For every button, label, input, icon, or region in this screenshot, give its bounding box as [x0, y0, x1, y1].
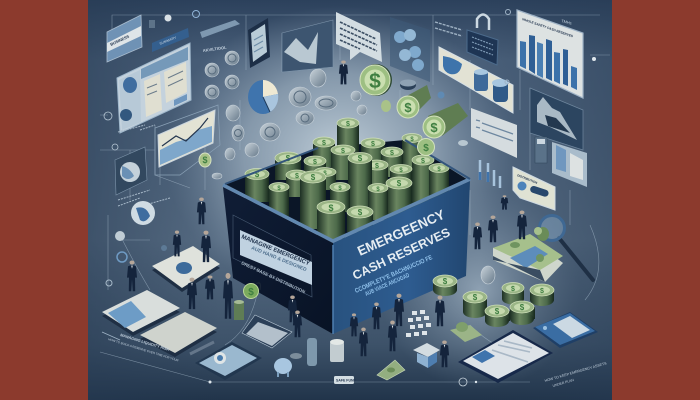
coin: small green left: [199, 153, 211, 167]
green coin stacks lower right: $: [443, 277, 448, 286]
coin roll: lower: [423, 103, 468, 138]
icon: green padlock tag: $: [248, 287, 254, 298]
scene: tablet: [195, 342, 262, 380]
coin stacks: $: [295, 173, 299, 180]
card: pill chart: [513, 167, 555, 210]
bin left label: MANAGINE EMERGENCY: [240, 234, 310, 267]
coin stacks: $: [277, 186, 281, 192]
connector lines: [100, 15, 610, 382]
green coin stacks lower right: $: [473, 293, 478, 302]
panel: honeycomb circles: [390, 17, 430, 82]
scene: glass box: [242, 315, 292, 348]
coin stacks: $: [322, 140, 326, 147]
coin: gray edge: [481, 266, 495, 284]
coin stacks: $: [421, 158, 425, 165]
bottom node: [208, 378, 477, 386]
button: blue bar: [152, 28, 189, 52]
bin left label: DRESY BASE BY DISTRIBUTION: [241, 260, 306, 294]
card: building chart: [552, 142, 587, 187]
small tag: bottom: [334, 376, 356, 384]
globe: [131, 201, 155, 225]
bin title: EMERGEENCY: [355, 207, 447, 259]
pie chart: [248, 80, 278, 114]
small gift box: [413, 343, 440, 368]
blue card: [533, 312, 598, 348]
coin stacks: $: [358, 208, 363, 217]
icons: top left: [104, 10, 200, 150]
business people: [127, 60, 527, 367]
cash bin: [223, 118, 470, 334]
coin stacks: $: [358, 154, 363, 163]
coin stacks: $: [375, 163, 379, 170]
coin: small green left: $: [202, 155, 208, 165]
caption: lower right: HOW TO KEEP EMERGENCY ASSETS: [544, 361, 608, 383]
coin stacks: $: [286, 154, 291, 163]
small label: top right: TMHs: [561, 18, 572, 26]
panel: dashboard window: [117, 43, 191, 133]
green coin stacks lower right: $: [540, 288, 544, 295]
caption: lower left: MANAGING LIQUIDITY RISK: [120, 333, 170, 352]
main panel: [88, 0, 612, 400]
small label: top right: [505, 10, 596, 84]
coin stacks: $: [311, 173, 316, 182]
white cubes: [406, 310, 431, 337]
green coin stacks lower right: $: [520, 303, 525, 312]
text lines: middle top: [435, 22, 462, 36]
scene: pen: [190, 342, 214, 354]
card: top left label: BUSINESS: [109, 34, 130, 47]
coin: big floating: $: [369, 70, 381, 93]
left data icons: [106, 231, 167, 286]
bin title: CASH RESERVES: [350, 225, 452, 283]
coin stacks: $: [338, 186, 342, 192]
scene: open book one: [102, 290, 180, 336]
icon: piggy bank: [274, 358, 292, 377]
panel: globe card: [115, 147, 147, 195]
panel: small mountain chart: [282, 20, 333, 72]
bin rim: [223, 179, 470, 241]
coin roll: upper: $: [404, 100, 412, 115]
coin stacks: $: [371, 141, 375, 148]
bin left label: [233, 215, 312, 297]
coin stacks: $: [376, 187, 380, 193]
panel: bar chart: WHOLE SAFETY CASH RESERVES: [522, 17, 573, 38]
panel: bar chart: [517, 10, 583, 98]
icon: padlock plate: [467, 14, 498, 65]
caption: lower left: HOW TO BUILD A RESERVE OVER TIME FOR YOUR: [108, 337, 180, 363]
card: pill chart: DISTRIBUTION: [517, 173, 538, 185]
coins: small floating green: [381, 80, 468, 156]
document tablet: [458, 330, 553, 383]
panel: line chart: [155, 105, 220, 175]
scene: open book two: [140, 312, 217, 357]
tablet device: [248, 18, 270, 68]
cash note bottom: [377, 360, 405, 380]
coin roll: lower: $: [430, 120, 438, 135]
coin stacks: $: [399, 168, 403, 174]
icon: calculator: [535, 137, 547, 163]
bin interior: [225, 140, 468, 240]
caption: lower right: UNDER PLAN: [552, 378, 575, 388]
small text: chart caption: AKVILTIOOL: [202, 45, 227, 53]
coin stacks: $: [328, 203, 334, 213]
scene: cylinders and jars: [234, 300, 344, 366]
coin stacks: $: [255, 170, 260, 179]
bin title: CCOMPLETY'E BACHNUCCIO FE: [354, 254, 434, 295]
coin roll: upper: [397, 85, 431, 118]
card: mid list: [471, 108, 517, 158]
bin title: [350, 207, 452, 298]
card: top left label: [107, 15, 142, 62]
coins: small floating green: $: [423, 143, 429, 154]
coin stacks: $: [313, 159, 317, 166]
speech bubble: [336, 12, 382, 62]
small text: left column: [118, 125, 170, 206]
coin stacks: $: [437, 167, 441, 173]
panel: mountain area chart: [530, 88, 583, 150]
icon: green padlock tag: [244, 283, 260, 298]
card: cylinders: [439, 47, 513, 113]
small note: green pile: [450, 322, 482, 342]
small roll by magnifier: [534, 227, 549, 241]
bin left face: [223, 187, 333, 334]
coin stacks: [245, 118, 449, 239]
button: blue bar: SUMMARY: [159, 35, 178, 46]
coin stacks: $: [323, 171, 327, 177]
coin stacks: $: [341, 148, 345, 155]
green coin stacks lower right: $: [511, 286, 515, 293]
coin stacks: $: [397, 179, 402, 188]
coin stacks: $: [390, 150, 394, 157]
bin left label: AUD HAND & DESIGNED: [250, 245, 308, 273]
coin stacks: $: [346, 121, 350, 128]
scene: platform book: [152, 246, 220, 292]
bin right face: [333, 181, 470, 334]
bin title: AUB VIACE ANCUGAD: [364, 273, 411, 298]
small bars chart: [480, 160, 500, 188]
money stacks: [493, 234, 563, 282]
green coin stacks lower right: $: [495, 307, 500, 316]
small tag: bottom: SAFE FUND: [336, 378, 356, 382]
coins: gray ring coins: [205, 51, 367, 179]
green coin stacks lower right: [433, 275, 554, 327]
magnifying glass: [540, 216, 593, 280]
coin stacks: $: [410, 137, 414, 143]
small text: chart caption: [200, 20, 240, 53]
coin: big floating: [360, 64, 392, 96]
